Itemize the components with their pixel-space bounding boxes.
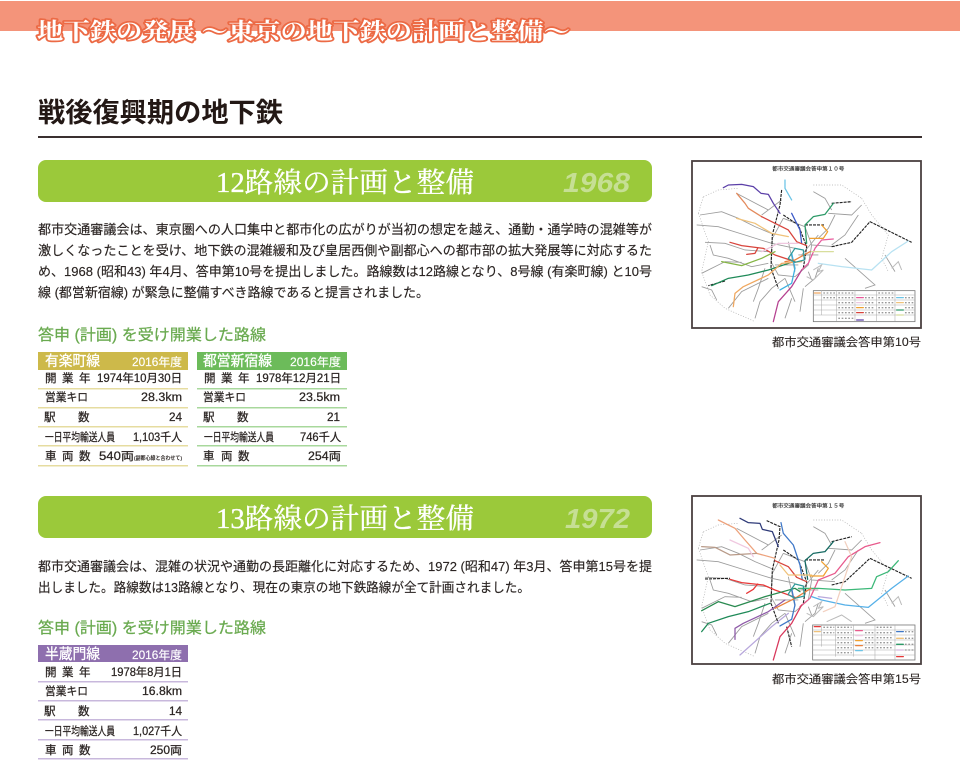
table: Yurakucho line: 1974年10月30日: [97, 371, 182, 385]
paragraph: report 15: 出しました。路線数は13路線となり、現在の東京の地下鉄路線が全て計画されました。: [38, 580, 530, 595]
table: Toei Shinjuku line: 車両数: [203, 449, 250, 463]
table: Toei Shinjuku line: 23.5km: [299, 392, 340, 404]
table: Yurakucho line: [38, 352, 188, 466]
paragraph: report 10: め、1968 (昭和43) 年4月、答申第10号を提出しました。路線数は12路線となり、8号線 (有楽町線) と10号: [38, 263, 652, 279]
map: report 10: 都市交通審議会答申第１０号: [772, 166, 844, 173]
table: Yurakucho line: 営業キロ: [45, 390, 88, 404]
header band: [0, 1, 960, 31]
table: Toei Shinjuku line: 一日平均輸送人員: [204, 430, 274, 444]
section heading: 戦後復興期の地下鉄: [38, 98, 283, 128]
table: Toei Shinjuku line: [197, 352, 347, 466]
caption: report 15: 都市交通審議会答申第15号: [772, 672, 921, 686]
table: Toei Shinjuku line: 開業年: [204, 371, 250, 385]
table: Yurakucho line: 1,103千人: [133, 431, 182, 444]
table: Toei Shinjuku line: 都営新宿線: [203, 353, 272, 370]
subheading: opened lines: 答申 (計画) を受け開業した路線: [38, 326, 267, 344]
banner: 12 lines: [38, 160, 652, 202]
table: Toei Shinjuku line: 2016年度: [290, 355, 342, 369]
paragraph: report 10: 激しくなったことを受け、地下鉄の混雑緩和及び皇居西側や副都心への都市部の拡大発展等に対応するた: [38, 242, 652, 258]
banner: 13 lines: [38, 496, 652, 538]
page title: 地下鉄の発展 ～東京の地下鉄の計画と整備～: [37, 19, 570, 44]
subheading: opened lines: 答申 (計画) を受け開業した路線: [38, 619, 267, 637]
table: Hanzomon line: 開業年: [45, 665, 90, 679]
table: Hanzomon line: 駅数: [44, 705, 90, 718]
table: Hanzomon line: 営業キロ: [45, 684, 88, 698]
panel: 12 lines plan: [38, 160, 652, 466]
table: Toei Shinjuku line: 営業キロ: [203, 390, 246, 404]
map legend: [813, 625, 915, 660]
table: Hanzomon line: 14: [169, 706, 183, 718]
paragraph: report 10: 都市交通審議会は、東京圏への人口集中と都市化の広がりが当初の想定を越え、通勤・通学時の混雑等が: [38, 221, 652, 237]
table: Toei Shinjuku line: 254両: [308, 451, 341, 463]
banner: 13 lines: 13路線の計画と整備: [216, 503, 474, 535]
paragraph: report 10: 線 (都営新宿線) が緊急に整備すべき路線であると提言されました。: [38, 285, 429, 300]
table: Toei Shinjuku line: 746千人: [300, 431, 341, 444]
table: Hanzomon line: 1,027千人: [133, 725, 182, 738]
banner: 13 lines: 1972: [565, 503, 630, 534]
table: Yurakucho line: 540両: [99, 451, 134, 463]
table: Yurakucho line: 24: [169, 412, 183, 424]
paragraph: report 15: [38, 558, 652, 595]
map: report 10: [692, 161, 921, 328]
table: Hanzomon line: 車両数: [45, 743, 91, 757]
table: Yurakucho line: 開業年: [45, 371, 90, 385]
map legend: [813, 291, 915, 322]
table: Hanzomon line: 16.8km: [142, 686, 182, 698]
table: Hanzomon line: 一日平均輸送人員: [45, 724, 115, 738]
table: Hanzomon line: 2016年度: [132, 648, 183, 662]
table: Hanzomon line: [38, 645, 188, 760]
table: Toei Shinjuku line: 駅数: [203, 411, 249, 424]
paragraph: report 10: [38, 221, 652, 300]
map: report 15: [692, 496, 921, 664]
map: report 15: 都市交通審議会答申第１５号: [772, 502, 844, 509]
table: Hanzomon line: 半蔵門線: [45, 646, 100, 663]
banner: 12 lines: 12路線の計画と整備: [216, 167, 474, 199]
table: Toei Shinjuku line: 1978年12月21日: [256, 371, 341, 385]
table: Yurakucho line: 一日平均輸送人員: [45, 430, 115, 444]
banner: 12 lines: 1968: [563, 167, 630, 198]
table: Yurakucho line: 駅数: [44, 411, 90, 424]
table: Yurakucho line: 車両数: [45, 449, 91, 463]
paragraph: report 15: 都市交通審議会は、混雑の状況や通勤の長距離化に対応するため、1972 (昭和47) 年3月、答申第15号を提: [38, 558, 652, 574]
table: Hanzomon line: 1978年8月1日: [111, 665, 182, 679]
table: Hanzomon line: 250両: [150, 745, 182, 757]
table: Yurakucho line: 28.3km: [141, 392, 182, 404]
caption: report 10: 都市交通審議会答申第10号: [772, 335, 921, 349]
table: Yurakucho line: 有楽町線: [45, 353, 100, 370]
panel: 13 lines plan: [38, 496, 652, 760]
table: Toei Shinjuku line: 21: [327, 412, 340, 424]
table: Yurakucho line: (副都心線と合わせて): [134, 454, 182, 462]
table: Yurakucho line: 2016年度: [132, 355, 183, 369]
